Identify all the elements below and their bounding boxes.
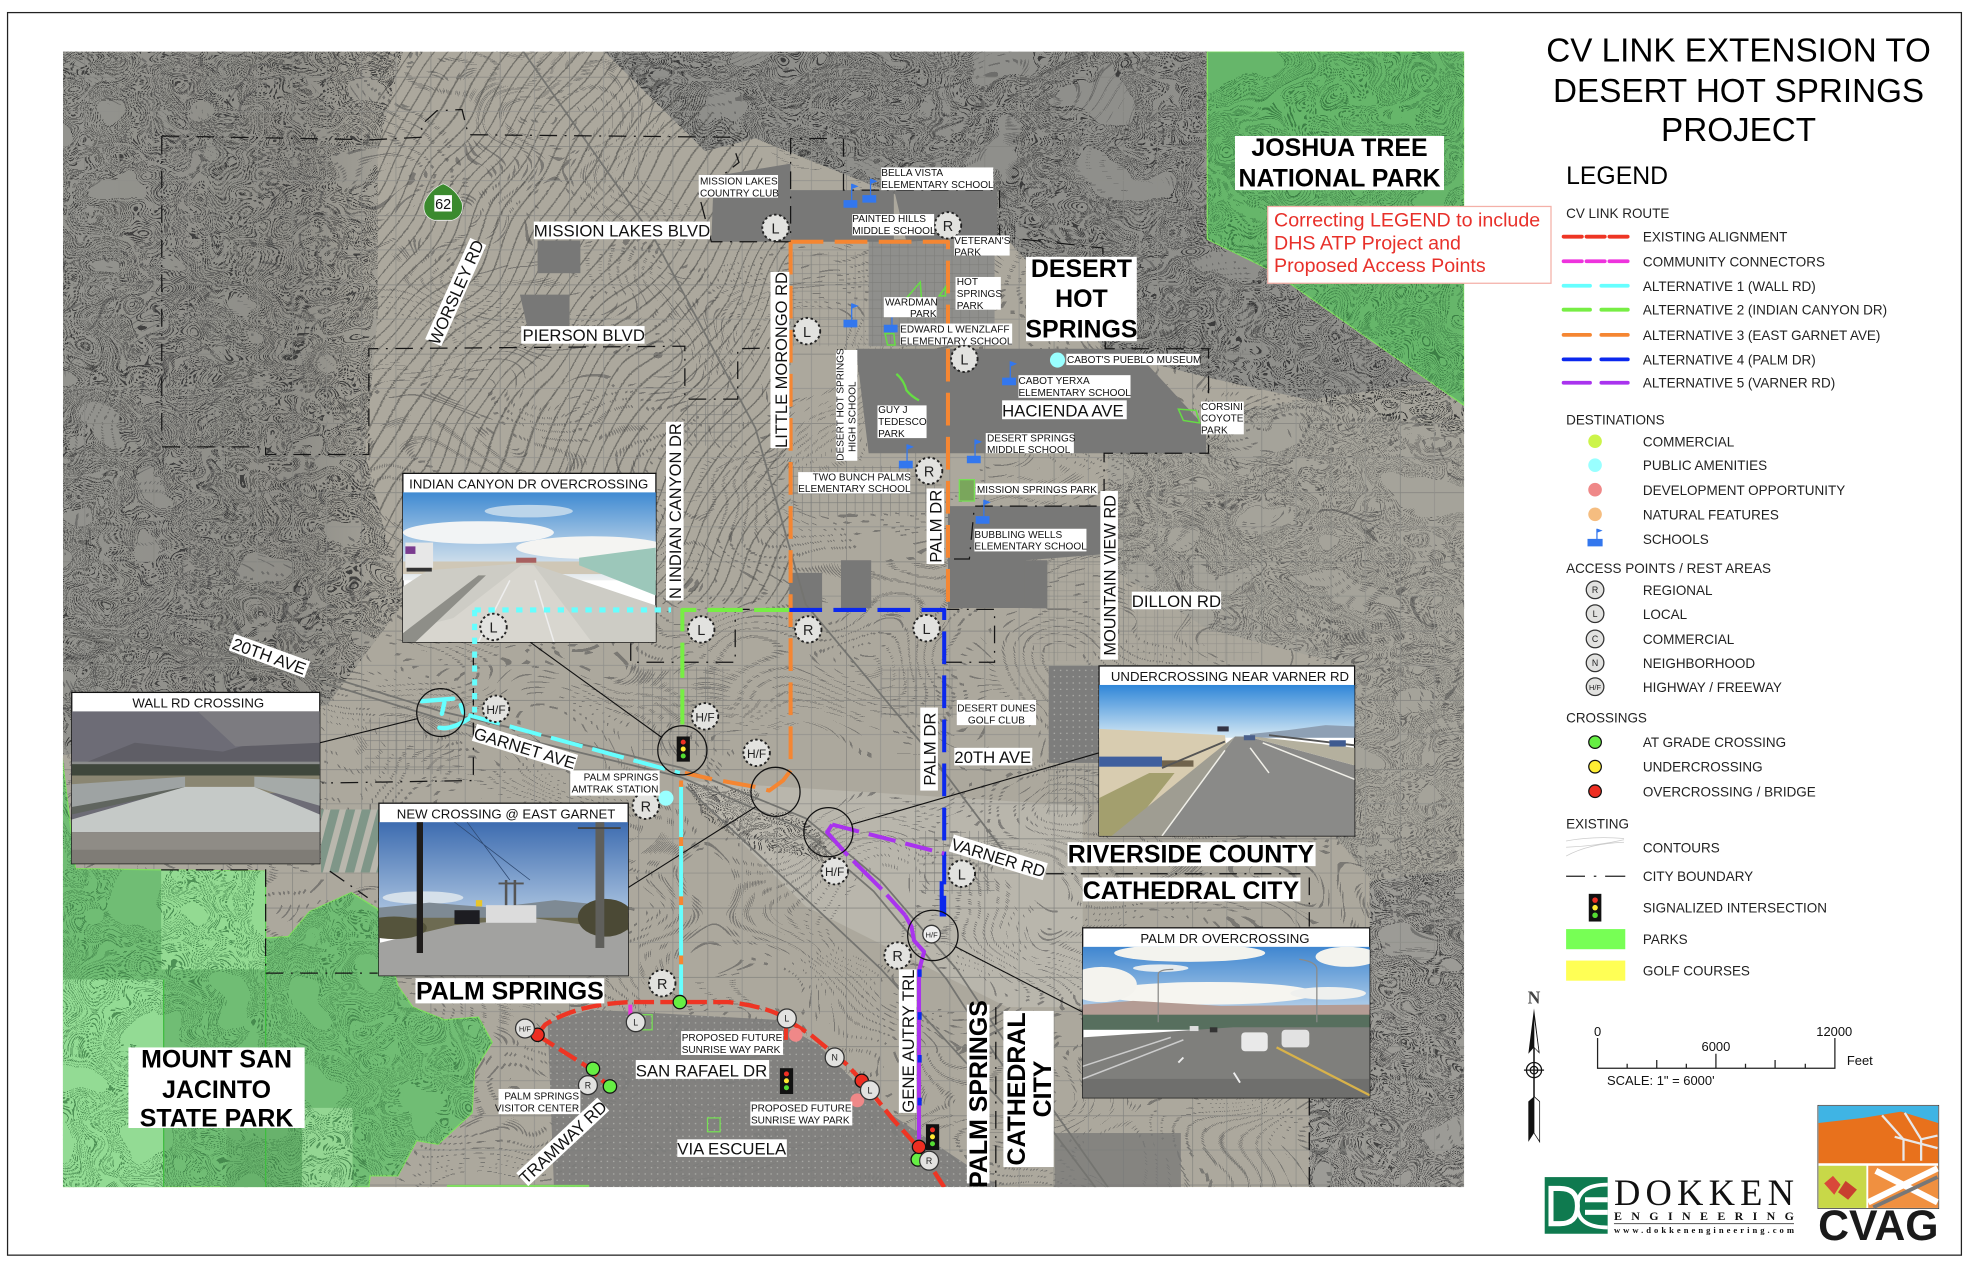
legend group: access points and rest areas: REGIONAL — [1643, 583, 1713, 598]
access points: dashed markers: R — [657, 977, 667, 993]
place label: Desert Springs Middle School — [986, 433, 1076, 456]
legend group: existing features: CITY BOUNDARY — [1643, 869, 1753, 884]
access points: solid markers: R — [585, 1080, 591, 1090]
legend group: existing features: SIGNALIZED INTERSECTION — [1643, 901, 1827, 916]
legend group: destinations — [1566, 412, 1845, 547]
scale bar: Feet — [1847, 1053, 1873, 1068]
map: city boundaries — [161, 110, 1309, 1187]
park: Joshua Tree National Park — [1207, 52, 1464, 405]
heading: Indian Canyon Dr overcrossing: INDIAN CANYON DR OVERCROSSING — [409, 476, 648, 491]
legend group: destinations: DESTINATIONS — [1566, 412, 1665, 427]
place label: Painted Hills Middle School — [852, 214, 936, 237]
place label: Proposed Future Sunrise Way Park south — [750, 1102, 852, 1127]
access points: dashed markers: H/F — [486, 703, 506, 717]
scale bar: 12000 — [1816, 1024, 1852, 1039]
access points: dashed markers: R — [641, 799, 651, 815]
place label: Mission Lakes Country Club: COUNTRY CLUB — [700, 188, 779, 199]
road label: Mountain View Rd: MOUNTAIN VIEW RD — [1101, 495, 1119, 656]
legend group: existing features: GOLF COURSES — [1643, 964, 1750, 979]
icon: highway 62 shield: 62 — [435, 197, 451, 213]
road label: N Indian Canyon Dr: N INDIAN CANYON DR — [667, 423, 685, 599]
label: Joshua Tree National Park: JOSHUA TREE — [1251, 134, 1428, 162]
leader lines — [320, 642, 1099, 1012]
place label: Bella Vista Elementary School — [881, 167, 994, 191]
logo: Dokken Engineering — [1545, 1172, 1794, 1235]
place label: Desert Hot Springs High School: HIGH SCHOOL — [847, 381, 858, 452]
legend group: destinations: COMMERCIAL — [1643, 434, 1735, 449]
access points: solid markers: R — [926, 1156, 932, 1166]
legend group: CV Link route: ALTERNATIVE 5 (VARNER RD) — [1643, 376, 1835, 391]
place label: Painted Hills Middle School: MIDDLE SCHOOL — [852, 226, 936, 237]
road label: Via Escuela: VIA ESCUELA — [677, 1139, 787, 1158]
access points: dashed markers — [480, 212, 978, 996]
place label: Desert Dunes Golf Club: GOLF CLUB — [968, 715, 1025, 726]
place label: Proposed Future Sunrise Way Park north — [681, 1031, 783, 1056]
legend group: crossings: AT GRADE CROSSING — [1643, 735, 1786, 750]
place label: Mission Lakes Country Club: MISSION LAKES — [700, 176, 778, 187]
access points: solid markers: H/F — [926, 930, 938, 939]
access points: dashed markers: L — [489, 621, 498, 637]
destination: school icons — [843, 179, 1017, 524]
logo: CVAG: CVAG — [1818, 1202, 1939, 1250]
park outlines — [640, 282, 1200, 1132]
scale bar: 6000 — [1702, 1039, 1730, 1054]
heading: new crossing at East Garnet: NEW CROSSING @ EAST GARNET — [397, 806, 615, 821]
legend group: access points and rest areas — [1566, 561, 1782, 696]
logo: CVAG — [1818, 1105, 1939, 1250]
access points: solid markers: N — [831, 1053, 838, 1063]
access points: dashed markers: L — [923, 622, 931, 638]
legend group: access points and rest areas: NEIGHBORHOOD — [1643, 656, 1755, 671]
access points: dashed markers: R — [924, 465, 934, 481]
callout: legend correction note: Proposed Access Points — [1274, 255, 1486, 277]
logo: Dokken Engineering: www.dokkenengineering.com — [1614, 1225, 1794, 1235]
label: Mount San Jacinto State Park — [128, 1046, 305, 1133]
place label: Guy J Tedesco Park: GUY J — [878, 405, 908, 416]
place label: Wardman Park — [884, 297, 938, 320]
place label: Veteran's Park: VETERAN'S — [954, 236, 1011, 247]
road label: Hacienda Ave: HACIENDA AVE — [1002, 402, 1124, 421]
logo: Dokken Engineering: DOKKEN — [1614, 1172, 1794, 1213]
legend group: CV Link route: ALTERNATIVE 3 (EAST GARNET AVE) — [1643, 328, 1880, 343]
map: urban development blocks — [520, 164, 1206, 1187]
access points: solid markers — [516, 925, 940, 1170]
place label: Desert Springs Middle School: DESERT SPRINGS — [987, 433, 1076, 444]
place label: Hot Springs Park: PARK — [957, 301, 984, 312]
scale bar: 0 — [1594, 1024, 1601, 1039]
legend group: destinations: NATURAL FEATURES — [1643, 507, 1779, 522]
heading: Palm Dr overcrossing: PALM DR OVERCROSSING — [1140, 931, 1310, 946]
label: Mount San Jacinto State Park: JACINTO — [162, 1076, 271, 1104]
place label: Hot Springs Park: SPRINGS — [957, 289, 1002, 300]
place label: Edward L Wenzlaff Elementary School: ELEMENTARY SCHOOL — [900, 336, 1013, 347]
callout: legend correction note — [1268, 206, 1551, 283]
label: Mount San Jacinto State Park: MOUNT SAN — [141, 1046, 292, 1074]
place label: Desert Hot Springs High School: DESERT HOT SPRINGS — [835, 348, 846, 461]
route: alternative 2 Indian Canyon Dr — [682, 610, 789, 728]
heading: undercrossing near Varner Rd: UNDERCROSSING NEAR VARNER RD — [1111, 669, 1349, 684]
legend group: access points and rest areas: N — [1592, 658, 1598, 668]
label: Joshua Tree National Park — [1235, 134, 1444, 192]
legend group: destinations: DEVELOPMENT OPPORTUNITY — [1643, 483, 1845, 498]
access points: dashed markers: R — [943, 219, 953, 235]
legend group: CV Link route: ALTERNATIVE 4 (PALM DR) — [1643, 352, 1816, 367]
legend group: existing features: EXISTING — [1566, 816, 1629, 831]
logo: Dokken Engineering: ENGINEERING — [1614, 1209, 1794, 1223]
legend group: CV Link route: COMMUNITY CONNECTORS — [1643, 254, 1825, 269]
place label: Corsini Coyote Park: COYOTE — [1201, 414, 1244, 425]
photo panel: Indian Canyon Dr overcrossing — [403, 473, 667, 642]
icon: highway 62 shield — [424, 184, 462, 220]
place label: Proposed Future Sunrise Way Park south: PROPOSED FUTURE — [751, 1104, 852, 1115]
legend group: access points and rest areas: R — [1592, 585, 1598, 595]
place label: Edward L Wenzlaff Elementary School — [900, 324, 1013, 347]
legend group: access points and rest areas: L — [1593, 609, 1598, 619]
place label: Palm Springs Amtrak Station: AMTRAK STATION — [572, 784, 658, 795]
place label: Guy J Tedesco Park: PARK — [878, 429, 905, 440]
legend group: access points and rest areas: HIGHWAY / FREEWAY — [1643, 680, 1782, 695]
road label: Tramway Rd: TRAMWAY RD — [516, 1097, 611, 1188]
place label: Wardman Park: PARK — [910, 309, 937, 320]
access points: dashed markers: L — [803, 325, 811, 341]
label: Desert Hot Springs: DESERT — [1031, 255, 1132, 283]
place label: Edward L Wenzlaff Elementary School: EDWARD L WENZLAFF — [900, 324, 1010, 335]
heading: Wall Rd crossing: WALL RD CROSSING — [132, 696, 264, 711]
place label: Palm Springs Amtrak Station — [570, 770, 660, 796]
place label: Two Bunch Palms Elementary School — [798, 472, 911, 495]
label: Cathedral City vertical — [1003, 1011, 1057, 1167]
label: Desert Hot Springs: HOT — [1055, 285, 1108, 313]
title: PROJECT — [1661, 112, 1816, 149]
road label: Worsley Rd: WORSLEY RD — [425, 237, 488, 348]
access points: dashed markers: H/F — [825, 865, 844, 879]
place label: Bubbling Wells Elementary School: BUBBLING WELLS — [974, 530, 1062, 541]
route: alternative 3 East Garnet Ave — [681, 242, 948, 1001]
road label: Dillon Rd: DILLON RD — [1132, 592, 1221, 611]
map: base terrain — [62, 25, 1464, 1187]
destination: public amenities and development opportunities — [658, 352, 1065, 1107]
access points: dashed markers: L — [771, 222, 780, 238]
road label: San Rafael Dr: SAN RAFAEL DR — [636, 1061, 767, 1080]
legend group: crossings: OVERCROSSING / BRIDGE — [1643, 784, 1816, 799]
legend group: destinations: SCHOOLS — [1643, 532, 1709, 547]
road label: 20th Ave west: 20TH AVE — [230, 635, 309, 679]
place label: Desert Hot Springs High School — [835, 348, 858, 461]
place label: Veteran's Park: PARK — [954, 248, 981, 259]
route: community connector — [629, 1005, 632, 1020]
icon: north arrow: N — [1528, 987, 1541, 1007]
route: alternative 4 Palm Dr — [789, 610, 944, 916]
place label: Cabot Yerxa Elementary School: CABOT YERXA — [1018, 376, 1090, 387]
crossings — [531, 995, 926, 1166]
park: Mount San Jacinto State Park — [62, 753, 589, 1187]
legend group: existing features: CONTOURS — [1643, 840, 1720, 855]
place label: Palm Springs Amtrak Station: PALM SPRINGS — [584, 773, 659, 784]
access points: dashed markers: H/F — [695, 710, 715, 724]
callout: legend correction note: DHS ATP Project and — [1274, 232, 1461, 254]
legend group: destinations: PUBLIC AMENITIES — [1643, 458, 1767, 473]
road label: Palm Dr lower: PALM DR — [920, 712, 939, 786]
photo panel: Palm Dr overcrossing — [1066, 928, 1379, 1098]
label: Joshua Tree National Park: NATIONAL PARK — [1238, 164, 1441, 192]
road label: Little Morongo Rd: LITTLE MORONGO RD — [773, 272, 791, 448]
legend group: CV Link route — [1564, 206, 1887, 391]
detail circles — [417, 689, 958, 961]
access points: dashed markers: L — [697, 623, 705, 639]
label: Cathedral City: CATHEDRAL CITY — [1083, 877, 1299, 905]
place label: Proposed Future Sunrise Way Park north: SUNRISE WAY PARK — [682, 1045, 781, 1056]
road labels — [228, 222, 1221, 1188]
place label: Hot Springs Park — [956, 277, 1002, 312]
place label: Desert Dunes Golf Club — [957, 700, 1036, 726]
legend group: crossings: UNDERCROSSING — [1643, 760, 1763, 775]
place label: Guy J Tedesco Park: TEDESCO — [878, 417, 927, 428]
legend group: crossings: CROSSINGS — [1566, 711, 1647, 726]
label: Cathedral City vertical: CITY — [1029, 1060, 1057, 1117]
label: Mount San Jacinto State Park: STATE PARK — [140, 1105, 293, 1133]
place label: Bubbling Wells Elementary School: ELEMENTARY SCHOOL — [974, 542, 1087, 553]
place label: Palm Springs Visitor Center — [495, 1089, 580, 1115]
road label: Garnet Ave: GARNET AVE — [472, 724, 578, 773]
legend group: access points and rest areas: C — [1592, 634, 1599, 644]
road label: Gene Autry Trl: GENE AUTRY TRL — [899, 970, 918, 1113]
scale bar — [1594, 1024, 1873, 1088]
legend group: access points and rest areas: ACCESS POINTS / REST AREAS — [1566, 561, 1771, 576]
label: Palm Springs vertical: PALM SPRINGS — [965, 1000, 993, 1188]
access points: solid markers: L — [633, 1017, 638, 1027]
place label: Cabot Yerxa Elementary School — [1018, 375, 1131, 399]
road label: Varner Rd: VARNER RD — [949, 835, 1047, 881]
photo panel: Wall Rd crossing — [72, 692, 320, 864]
legend group: CV Link route: ALTERNATIVE 1 (WALL RD) — [1643, 279, 1816, 294]
place label: Wardman Park: WARDMAN — [885, 297, 938, 308]
legend group: CV Link route: CV LINK ROUTE — [1566, 206, 1669, 221]
label: Palm Springs: PALM SPRINGS — [416, 978, 604, 1006]
place label: Cabot's Pueblo Museum: CABOT'S PUEBLO MUSEUM — [1067, 355, 1201, 366]
access points: dashed markers: R — [892, 949, 903, 965]
road label: 20th Ave east: 20TH AVE — [954, 748, 1031, 767]
road label: Mission Lakes Blvd: MISSION LAKES BLVD — [534, 222, 710, 241]
access points: dashed markers: L — [960, 352, 968, 368]
place label: Painted Hills Middle School: PAINTED HILLS — [852, 214, 926, 225]
legend group: access points and rest areas: COMMERCIAL — [1643, 632, 1735, 647]
signalized intersections — [677, 736, 939, 1150]
place label: Two Bunch Palms Elementary School: TWO BUNCH PALMS — [813, 472, 911, 483]
title — [1546, 33, 1931, 149]
small place labels — [495, 167, 1244, 1127]
place label: Bella Vista Elementary School: BELLA VISTA — [881, 168, 943, 179]
place label: Desert Dunes Golf Club: DESERT DUNES — [957, 703, 1036, 714]
title: DESERT HOT SPRINGS — [1553, 73, 1924, 110]
place label: Proposed Future Sunrise Way Park south: SUNRISE WAY PARK — [751, 1116, 850, 1127]
place label: Corsini Coyote Park: CORSINI — [1201, 402, 1243, 413]
photo panel: undercrossing near Varner Rd — [1099, 666, 1355, 836]
place label: Hot Springs Park: HOT — [957, 277, 978, 288]
icon: north arrow — [1524, 987, 1544, 1142]
access points: dashed markers: L — [958, 867, 966, 883]
access points: solid markers: H/F — [519, 1025, 531, 1034]
map: freeway and rail corridor — [63, 50, 1108, 1187]
route: alternative 1 Wall Rd — [422, 610, 681, 1001]
legend group: existing features: PARKS — [1643, 932, 1688, 947]
legend heading: LEGEND — [1566, 163, 1668, 190]
label: Desert Hot Springs: SPRINGS — [1025, 315, 1137, 343]
place label: Guy J Tedesco Park — [877, 405, 927, 440]
place label: Bubbling Wells Elementary School — [974, 529, 1087, 553]
legend group: CV Link route: ALTERNATIVE 2 (INDIAN CANYON DR) — [1643, 303, 1887, 318]
place label: Desert Springs Middle School: MIDDLE SCHOOL — [987, 445, 1071, 456]
route: alternative 5 Varner Rd — [827, 825, 944, 1139]
callout: legend correction note: Correcting LEGEND to include — [1274, 210, 1540, 232]
legend group: access points and rest areas: LOCAL — [1643, 607, 1688, 622]
label: Desert Hot Springs — [1025, 255, 1137, 343]
title: CV LINK EXTENSION TO — [1546, 33, 1931, 70]
label: Cathedral City vertical: CATHEDRAL — [1003, 1012, 1031, 1166]
legend group: existing features — [1566, 816, 1827, 981]
scale bar: SCALE: 1" = 6000' — [1607, 1073, 1715, 1088]
place label: Corsini Coyote Park: PARK — [1201, 426, 1228, 437]
map: fine street grids — [365, 239, 1259, 894]
access points: dashed markers: R — [803, 623, 813, 639]
access points: dashed markers: H/F — [747, 747, 766, 761]
road label: Palm Dr upper: PALM DR — [927, 490, 946, 563]
access points: solid markers: L — [867, 1085, 872, 1095]
legend group: crossings — [1566, 711, 1816, 799]
legend group: access points and rest areas: H/F — [1589, 683, 1602, 692]
place label: Palm Springs Visitor Center: PALM SPRINGS — [504, 1092, 579, 1103]
place label: Palm Springs Visitor Center: VISITOR CENTER — [495, 1104, 579, 1115]
road label: Pierson Blvd: PIERSON BLVD — [522, 326, 645, 345]
label: Riverside County: RIVERSIDE COUNTY — [1068, 840, 1314, 868]
legend group: CV Link route: EXISTING ALIGNMENT — [1643, 230, 1787, 245]
place label: Bella Vista Elementary School: ELEMENTARY SCHOOL — [881, 180, 994, 191]
place label: Two Bunch Palms Elementary School: ELEMENTARY SCHOOL — [798, 484, 911, 495]
photo panel: new crossing at East Garnet — [361, 803, 633, 976]
place label: Cabot Yerxa Elementary School: ELEMENTARY SCHOOL — [1018, 388, 1131, 399]
access points: solid markers: L — [784, 1014, 789, 1024]
place label: Corsini Coyote Park — [1201, 402, 1244, 437]
place label: Proposed Future Sunrise Way Park north: PROPOSED FUTURE — [682, 1033, 783, 1044]
place label: Veteran's Park — [954, 235, 1011, 259]
place label: Mission Lakes Country Club — [699, 175, 779, 199]
route: existing alignment — [537, 1002, 944, 1187]
legend — [1564, 163, 1887, 981]
place label: Mission Springs Park: MISSION SPRINGS PARK — [977, 485, 1097, 496]
